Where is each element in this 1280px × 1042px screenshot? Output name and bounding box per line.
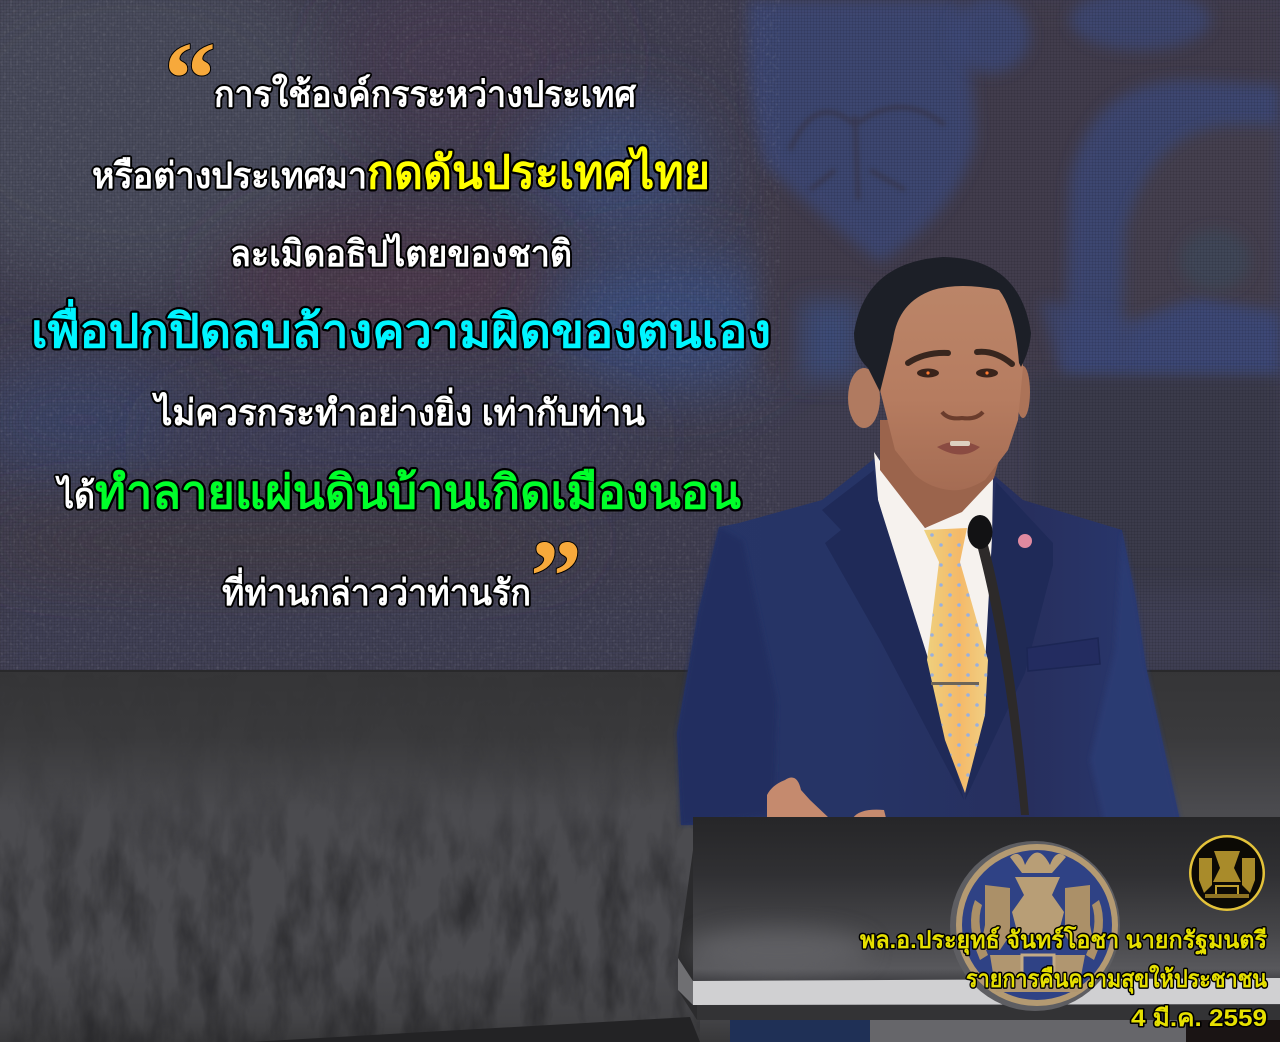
- gold tie: [924, 528, 988, 793]
- line 4: เพื่อปกปิดลบล้างความผิดของตนเอง: [31, 299, 771, 357]
- line 7: ที่ท่านกล่าวว่าท่านรัก: [222, 567, 531, 613]
- speaker name: พล.อ.ประยุทธ์ จันทร์โอชา นายกรัฐมนตรี: [860, 925, 1267, 956]
- podium white strip: [678, 958, 693, 1005]
- blue teardrop motif: [748, 0, 975, 262]
- small gold emblem: [1189, 835, 1265, 911]
- line 6: ได้: [54, 474, 95, 516]
- dark purple background behind motifs: [760, 0, 1280, 380]
- right sleeve shading: [1090, 530, 1181, 825]
- left lapel: [822, 470, 964, 800]
- blue arch motif: [1065, 80, 1280, 380]
- line 5: ไม่ควรกระทำอย่างยิ่ง เท่ากับท่าน: [151, 387, 645, 433]
- podium side wedge: [678, 850, 720, 1020]
- right lapel: [965, 482, 1053, 800]
- background: stage curtain: [0, 670, 1280, 1042]
- jacket pocket: [1027, 638, 1100, 671]
- hand: [767, 778, 886, 818]
- line 2: หรือต่างประเทศมา: [92, 155, 367, 196]
- attribution caption: [860, 925, 1268, 1032]
- neck and head: [848, 257, 1031, 528]
- podium: [678, 817, 1280, 1042]
- suit jacket: [677, 458, 1181, 825]
- line 2: [92, 146, 710, 198]
- line 3: ละเมิดอธิปไตยของชาติ: [230, 232, 572, 274]
- background: LED screen: [0, 0, 1280, 672]
- line 6: ทำลายแผ่นดินบ้านเกิดเมืองนอน: [95, 466, 742, 518]
- closing quotation mark: ”: [530, 519, 582, 634]
- microphone: [968, 515, 1029, 815]
- line 2: กดดันประเทศไทย: [367, 146, 710, 198]
- podium government seal: [950, 841, 1120, 1011]
- date: 4 มี.ค. 2559: [1131, 1005, 1267, 1032]
- quote text: [31, 21, 771, 634]
- opening quotation mark: “: [164, 21, 216, 136]
- left sleeve shading: [677, 527, 777, 825]
- line 1: การใช้องค์กรระหว่างประเทศ: [214, 72, 637, 114]
- lapel pin: [1018, 534, 1032, 548]
- shirt: [874, 452, 993, 680]
- speaker in suit: [677, 257, 1181, 825]
